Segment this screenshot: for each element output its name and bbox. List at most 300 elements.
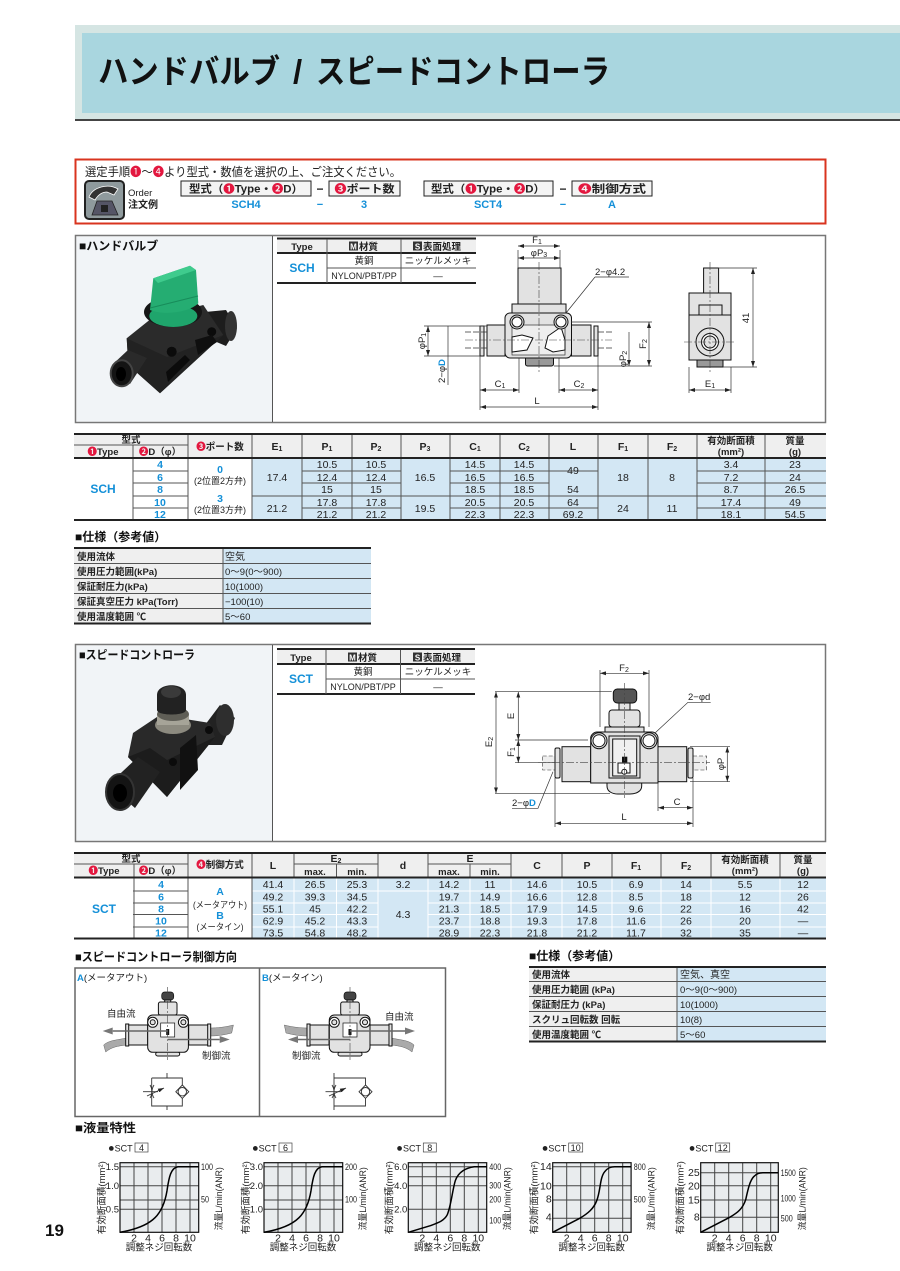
chart: SCT 8: 流量L/min(ANR) (501, 1167, 512, 1230)
table: SCT dimensions: 26 (797, 892, 809, 904)
table: SCH dimensions: 1 (329, 446, 333, 453)
order code SCH: ❸ポート数 (334, 182, 394, 196)
chart: SCT 8: 6.0 (394, 1162, 407, 1173)
chart: SCT 8 (383, 1143, 512, 1254)
chart: SCT 4: 8 (173, 1233, 179, 1245)
table: SCT dimensions: 49.2 (263, 892, 283, 904)
table: SCH dimensions: C (518, 441, 526, 453)
table: SCT dimensions: B (216, 910, 224, 922)
table: SCT dimensions: 23.7 (439, 916, 459, 928)
table: SCT dimensions: 2 (338, 858, 342, 865)
table: SCT dimensions: 4 (158, 879, 164, 891)
chart: SCT 12 (675, 1143, 808, 1254)
icon: telephone (85, 181, 124, 219)
table: SCH material (277, 238, 476, 283)
table: SCH dimensions: 17.8 (317, 497, 337, 509)
table: SCH dimensions: 15 (370, 484, 382, 496)
drawing: hand valve side: 41 (741, 313, 752, 323)
chart: SCT 10: 10 (571, 1143, 581, 1153)
table: SCH dimensions: 24 (789, 472, 801, 484)
table: SCH dimensions: (mm²) (718, 447, 744, 458)
chart: SCT 8: 有効断面積(mm²) (383, 1161, 395, 1234)
chart: SCT 4: 1.5 (106, 1162, 119, 1173)
drawing: speed controller: F (619, 663, 625, 674)
table: SCH specifications: 保証真空圧力 kPa(Torr) (77, 596, 178, 608)
table: SCH dimensions: 18.1 (721, 509, 741, 521)
drawing: hand valve front: C (495, 379, 501, 390)
table: SCH dimensions: L (570, 441, 577, 453)
table: SCT dimensions: 14.9 (480, 892, 500, 904)
table: SCT dimensions: 11.7 (626, 928, 646, 940)
order code SCT: − (560, 199, 566, 211)
table: SCT dimensions: 4.3 (396, 909, 410, 921)
table: SCT dimensions: 6.9 (629, 879, 643, 891)
labels: flow direction (107, 1008, 414, 1062)
heading: control direction: ■スピードコントローラ制御方向 (75, 949, 237, 964)
chart: SCT 6: 6 (303, 1233, 309, 1245)
drawing: hand valve front: 1 (501, 383, 505, 390)
chart: SCT 6: ●SCT (252, 1143, 277, 1155)
table: SCT dimensions: 43.3 (347, 916, 367, 928)
table: SCH dimensions: 2 (673, 446, 677, 453)
table: SCH dimensions: F (667, 441, 673, 453)
table: SCT specifications: 使用流体 (532, 969, 571, 981)
table: SCT dimensions: 12 (797, 879, 809, 891)
table: SCT dimensions: — (798, 916, 809, 928)
table: SCT specifications (529, 967, 826, 1042)
table: SCT dimensions: min. (480, 867, 500, 878)
order code SCH: 型式（❶Type・❷D） (189, 182, 303, 196)
photo: hand valve (111, 266, 237, 393)
order label: 注文例 (128, 198, 158, 211)
table: SCH material: ニッケルメッキ (405, 256, 471, 267)
table: SCT dimensions: 21.2 (577, 928, 597, 940)
table: SCH dimensions: 2 (526, 446, 530, 453)
heading: speed controller: ■スピードコントローラ (79, 648, 195, 662)
table: SCT dimensions: F (631, 860, 637, 872)
table: SCT dimensions: 質量 (793, 854, 813, 866)
table: SCT dimensions: 3.2 (396, 879, 410, 891)
table: SCT dimensions: 25.3 (347, 879, 367, 891)
chart: SCT 12: 12 (718, 1143, 728, 1153)
chart: SCT 4: 50 (201, 1195, 209, 1205)
chart: SCT 8: 2.0 (394, 1205, 407, 1216)
table: SCH dimensions: ❶Type (88, 447, 118, 458)
chart: SCT 8: 4.0 (394, 1181, 407, 1192)
table: SCH dimensions: 3.4 (724, 459, 738, 471)
drawing: hand valve front: φP (531, 248, 543, 259)
chart: SCT 10: 流量L/min(ANR) (646, 1167, 657, 1230)
table: SCT dimensions: E (331, 853, 338, 865)
table: SCT dimensions: 17.9 (527, 904, 547, 916)
table: SCH dimensions: 12.4 (317, 472, 337, 484)
order code SCH (181, 181, 400, 211)
chart: SCT 6: 調整ネジ回転数 (270, 1242, 337, 1254)
table: SCH dimensions: 16.5 (415, 472, 435, 484)
table: SCH dimensions: ❸ポート数 (196, 441, 244, 453)
drawing: hand valve front: 2 (642, 339, 649, 343)
order code SCH: 3 (361, 199, 367, 211)
chart: SCT 4: 2 (131, 1233, 137, 1245)
table: SCT dimensions: (mm²) (732, 866, 758, 877)
table: SCT specifications: 保証耐圧力 (kPa) (532, 999, 605, 1011)
chart: SCT 6: 8 (317, 1233, 323, 1245)
table: SCT dimensions: ❶Type (89, 866, 119, 877)
drawing: hand valve side (684, 262, 757, 393)
symbol: meter in (326, 1073, 372, 1110)
table: SCT dimensions: 11.6 (626, 916, 646, 928)
chart: SCT 12: 4 (726, 1233, 732, 1245)
table: SCH material: SCH (289, 261, 315, 275)
table: SCH dimensions: 6 (157, 472, 163, 484)
heading: SCH specifications: ■仕様（参考値） (75, 529, 166, 544)
table: SCT dimensions: 41.4 (263, 879, 283, 891)
table: SCT dimensions: 有効断面積 (721, 854, 769, 866)
table: SCT dimensions: max. (304, 867, 326, 878)
table: SCH dimensions: 10.5 (366, 459, 386, 471)
table: SCT dimensions: 6 (158, 892, 164, 904)
table: SCH dimensions: 20.5 (465, 497, 485, 509)
table: SCT specifications: 空気、真空 (680, 968, 730, 981)
table: SCT dimensions: 9.6 (629, 904, 643, 916)
table: SCT dimensions: d (400, 860, 406, 872)
chart: SCT 10: 8 (546, 1194, 552, 1206)
chart: SCT 12: 調整ネジ回転数 (706, 1242, 773, 1254)
chart: SCT 8: 10 (472, 1233, 484, 1245)
table: SCH specifications: 使用圧力範囲(kPa) (77, 566, 157, 578)
table: SCT dimensions: 8.5 (629, 892, 643, 904)
drawing: speed controller: 2−φd (688, 692, 710, 703)
chart: SCT 10: 500 (634, 1195, 646, 1205)
table: SCH dimensions: 18 (617, 472, 629, 484)
order code SCH: − (317, 199, 323, 211)
table: SCT dimensions: 1 (637, 865, 641, 872)
drawing: speed controller: φP (716, 758, 727, 770)
table: SCH dimensions: 8 (157, 484, 163, 496)
chart: SCT 6: 2 (275, 1233, 281, 1245)
chart: SCT 12: ●SCT (689, 1143, 714, 1155)
table: SCT specifications: スクリュ回転数 回転 (532, 1014, 621, 1026)
chart: SCT 6: 10 (328, 1233, 340, 1245)
table: SCH dimensions: 69.2 (563, 509, 583, 521)
table: SCT dimensions: 型式 (121, 853, 141, 865)
table: SCH dimensions: P (420, 441, 427, 453)
table: SCH dimensions: 26.5 (785, 484, 805, 496)
table: SCT dimensions: 16.6 (527, 892, 547, 904)
order label: Order (128, 188, 152, 199)
chart: SCT 10 (529, 1143, 657, 1254)
table: SCH dimensions: 17.8 (366, 497, 386, 509)
chart: SCT 4: 調整ネジ回転数 (126, 1242, 193, 1254)
table: SCH material: 黄銅 (354, 255, 374, 267)
table: SCT material: Type (290, 653, 312, 664)
chart: SCT 12: 10 (765, 1233, 777, 1245)
table: SCH specifications: 使用流体 (77, 551, 116, 563)
table: SCT dimensions: 54.8 (305, 928, 325, 940)
table: SCH dimensions: 1 (279, 446, 283, 453)
table: SCT material: 表面処理 (423, 652, 462, 664)
table: SCH dimensions: 3 (217, 493, 223, 505)
table: SCH material: S (415, 242, 421, 252)
labels: flow direction: 自由流 (385, 1011, 414, 1023)
order code SCT (424, 181, 652, 211)
labels: flow direction: 制御流 (292, 1050, 321, 1062)
drawing: hand valve front: 1 (421, 333, 428, 337)
table: SCT dimensions: 18 (680, 892, 692, 904)
table: SCH dimensions (74, 434, 826, 521)
table: SCT dimensions: 10.5 (577, 879, 597, 891)
chart: SCT 4: 4 (139, 1143, 144, 1153)
title (98, 53, 610, 90)
chart: SCT 4: 有効断面積(mm²) (96, 1161, 108, 1234)
table: SCH specifications: 10(1000) (225, 582, 263, 593)
table: SCT dimensions: 21.8 (527, 928, 547, 940)
order code SCH: − (316, 182, 324, 196)
table: SCT dimensions: 10 (155, 916, 167, 928)
table: SCT material: 黄銅 (353, 666, 373, 678)
drawing: hand valve front: F (532, 235, 538, 246)
chart: SCT 4 (96, 1143, 224, 1254)
table: SCT material: 材質 (358, 652, 378, 664)
table: SCT dimensions: 19.7 (439, 892, 459, 904)
drawing: hand valve front: 1 (538, 239, 542, 246)
table: SCT dimensions: 21.3 (439, 904, 459, 916)
table: SCH dimensions: 10 (154, 497, 166, 509)
chart: SCT 6: 流量L/min(ANR) (357, 1167, 368, 1230)
chart: SCT 8: 6 (447, 1233, 453, 1245)
order label (128, 188, 158, 211)
chart: SCT 8: 300 (489, 1181, 501, 1191)
table: SCH dimensions: SCH (90, 482, 116, 496)
chart: SCT 4: 100 (201, 1162, 213, 1172)
chart: SCT 10: 6 (592, 1233, 598, 1245)
table: SCT material: S (415, 654, 421, 662)
table: SCH material: M (350, 242, 357, 252)
table: SCH specifications: 0〜9(0〜900) (225, 567, 282, 578)
order code SCT: SCT4 (474, 199, 503, 211)
table: SCH specifications: −100(10) (225, 597, 263, 608)
table: SCH dimensions: (2位置2方弁) (194, 475, 246, 486)
table: SCT dimensions: ❹制御方式 (196, 859, 244, 871)
table: SCT dimensions: 34.5 (347, 892, 367, 904)
table: SCT dimensions: 20 (739, 916, 751, 928)
table: SCT dimensions: ❷D（φ） (139, 865, 181, 877)
table: SCT dimensions: 62.9 (263, 916, 283, 928)
table: SCH dimensions: 16.5 (514, 472, 534, 484)
table: SCH dimensions: 12 (154, 509, 166, 521)
chart: SCT 6: 1.0 (250, 1205, 263, 1216)
chart: SCT 10: 4 (578, 1233, 584, 1245)
table: SCH material: NYLON/PBT/PP (331, 271, 397, 281)
table: SCT specifications: 10(1000) (680, 1000, 718, 1011)
chart: SCT 12: 25 (688, 1167, 700, 1179)
table: SCT dimensions: 22 (680, 904, 692, 916)
chart: SCT 8: 200 (489, 1195, 501, 1205)
title: ハンドバルブ (98, 53, 280, 90)
drawing: hand valve front: φP (618, 355, 629, 367)
table: SCH dimensions: 21.2 (366, 509, 386, 521)
table: SCT specifications: 0〜9(0〜900) (680, 985, 737, 996)
table: SCH dimensions: 1 (624, 446, 628, 453)
table: SCT dimensions: 17.8 (577, 916, 597, 928)
table: SCT dimensions: 8 (158, 904, 164, 916)
chart: SCT 10: 10 (540, 1181, 552, 1193)
chart: SCT 4: 流量L/min(ANR) (213, 1167, 224, 1230)
chart: SCT 8: 2 (419, 1233, 425, 1245)
table: SCH dimensions: 18.5 (514, 484, 534, 496)
chart: SCT 12: 1000 (781, 1194, 796, 1204)
chart: SCT 12: 6 (740, 1233, 746, 1245)
title banner (75, 25, 900, 121)
table: SCH dimensions: 16.5 (465, 472, 485, 484)
chart: SCT 6: 4 (289, 1233, 295, 1245)
table: SCT material: M (349, 654, 356, 662)
table: SCT dimensions: 48.2 (347, 928, 367, 940)
table: SCT dimensions (74, 853, 826, 940)
chart: SCT 12: 20 (688, 1181, 700, 1193)
table: SCT dimensions: 18.8 (480, 916, 500, 928)
title: / (293, 53, 302, 90)
chart: SCT 6: 2.0 (250, 1181, 263, 1192)
title: スピードコントローラ (316, 53, 610, 90)
table: SCT material (277, 649, 475, 694)
labels: flow direction: 制御流 (202, 1050, 231, 1062)
table: SCH dimensions: 23 (789, 459, 801, 471)
table: SCH dimensions: 49 (789, 497, 801, 509)
chart: SCT 12: 有効断面積(mm²) (675, 1161, 687, 1234)
drawing: hand valve front: C (574, 379, 580, 390)
table: SCH dimensions: P (322, 441, 329, 453)
order example box (76, 160, 826, 224)
table: SCH dimensions: 17.4 (721, 497, 741, 509)
table: SCH dimensions: 12.4 (366, 472, 386, 484)
drawing: hand valve side: 1 (711, 383, 715, 390)
table: SCH dimensions: 2 (378, 446, 382, 453)
table: SCH material: Type (291, 242, 313, 253)
table: SCT dimensions: 45 (309, 904, 321, 916)
table: SCH dimensions: 22.3 (465, 509, 485, 521)
table: SCT dimensions: 45.2 (305, 916, 325, 928)
chart: SCT 10: 800 (634, 1162, 646, 1172)
table: SCT dimensions: 12 (739, 892, 751, 904)
table: SCH material: — (433, 271, 443, 282)
table: SCH specifications: 使用温度範囲 ℃ (77, 611, 147, 623)
page number: 19 (45, 1221, 64, 1240)
table: SCH material: 表面処理 (423, 241, 462, 253)
table: SCH dimensions: 64 (567, 497, 579, 509)
chart: SCT 6: 200 (345, 1162, 357, 1172)
table: SCT dimensions: 14.5 (577, 904, 597, 916)
table: SCH dimensions: 4 (157, 459, 163, 471)
panel: hand valve (76, 235, 826, 422)
table: SCH dimensions: (g) (789, 447, 801, 458)
order code SCT: ❹制御方式 (578, 182, 646, 196)
labels: flow direction: 自由流 (107, 1008, 136, 1020)
table: SCH dimensions: 19.5 (415, 503, 435, 515)
chart: SCT 12: 2 (712, 1233, 718, 1245)
table: SCH dimensions: 22.3 (514, 509, 534, 521)
table: SCH dimensions: 14.5 (465, 459, 485, 471)
table: SCT dimensions: — (798, 928, 809, 940)
chart: SCT 8: 400 (489, 1162, 501, 1172)
heading: hand valve: ■ハンドバルブ (79, 238, 158, 253)
drawing: speed controller: 2 (625, 667, 629, 674)
table: SCT dimensions: 55.1 (263, 904, 283, 916)
chart: SCT 10: ●SCT (542, 1143, 567, 1155)
drawing: speed controller: L (621, 812, 627, 823)
chart: SCT 6: 3.0 (250, 1162, 263, 1173)
table: SCH specifications: 空気 (225, 550, 245, 563)
table: SCH dimensions: 有効断面積 (707, 435, 755, 447)
table: SCT dimensions: (メータイン) (196, 922, 244, 932)
chart: SCT 4: ●SCT (108, 1143, 133, 1155)
table: SCH dimensions: 3 (427, 446, 431, 453)
drawing: hand valve front: 2 (622, 351, 629, 355)
panel: control direction (75, 968, 446, 1116)
table: SCT dimensions: 39.3 (305, 892, 325, 904)
chart: SCT 4: 4 (145, 1233, 151, 1245)
table: SCT material: NYLON/PBT/PP (330, 682, 396, 692)
drawing: hand valve front: L (534, 396, 540, 407)
chart: SCT 6: 6 (283, 1143, 288, 1153)
table: SCT dimensions: 35 (739, 928, 751, 940)
chart: SCT 8: 100 (489, 1216, 501, 1226)
drawing: hand valve front: F (638, 343, 649, 349)
table: SCT dimensions: 18.5 (480, 904, 500, 916)
table: SCH specifications (74, 548, 371, 624)
table: SCT material: — (433, 682, 443, 693)
table: SCT dimensions: min. (347, 867, 367, 878)
table: SCT dimensions: SCT (92, 902, 117, 916)
chart: SCT 12: 8 (694, 1212, 700, 1224)
table: SCH dimensions: E (272, 441, 279, 453)
chart: SCT 4: 6 (159, 1233, 165, 1245)
table: SCT dimensions: 26.5 (305, 879, 325, 891)
chart: SCT 12: 流量L/min(ANR) (797, 1167, 808, 1230)
chart: SCT 12: 15 (688, 1195, 700, 1207)
chart: SCT 4: 1.0 (106, 1181, 119, 1192)
drawing: hand valve side: E (705, 379, 711, 390)
diagram: meter in valve (284, 987, 415, 1060)
diagram: meter out valve (103, 987, 233, 1060)
table: SCT dimensions: max. (438, 867, 460, 878)
table: SCH dimensions: (2位置3方弁) (194, 504, 246, 515)
order code SCH: SCH4 (231, 199, 262, 211)
chart: SCT 12: 8 (754, 1233, 760, 1245)
drawing: speed controller: F (506, 751, 517, 757)
table: SCT dimensions: 42.2 (347, 904, 367, 916)
label: meter in: B(メータイン) (262, 973, 323, 984)
table: SCH dimensions: 8 (669, 472, 675, 484)
table: SCH dimensions: 15 (321, 484, 333, 496)
table: SCT dimensions: 16 (739, 904, 751, 916)
chart: SCT 6: 有効断面積(mm²) (240, 1161, 252, 1234)
table: SCH dimensions: 11 (667, 503, 678, 515)
chart: SCT 8: 調整ネジ回転数 (414, 1242, 481, 1254)
chart: SCT 10: 8 (606, 1233, 612, 1245)
table: SCT specifications: 使用温度範囲 ℃ (532, 1029, 602, 1041)
drawing: speed controller: C (674, 797, 681, 808)
table: SCH dimensions: 54.5 (785, 509, 805, 521)
drawing: hand valve front: φP (417, 337, 428, 349)
order code SCT: 型式（❶Type・❷D） (431, 182, 545, 196)
table: SCT dimensions: A (216, 886, 224, 898)
table: SCH dimensions: C (469, 441, 477, 453)
table: SCT dimensions: 11 (485, 879, 496, 891)
table: SCT dimensions: C (533, 860, 541, 872)
chart: SCT 6 (240, 1143, 368, 1254)
chart: SCT 4: 10 (184, 1233, 196, 1245)
